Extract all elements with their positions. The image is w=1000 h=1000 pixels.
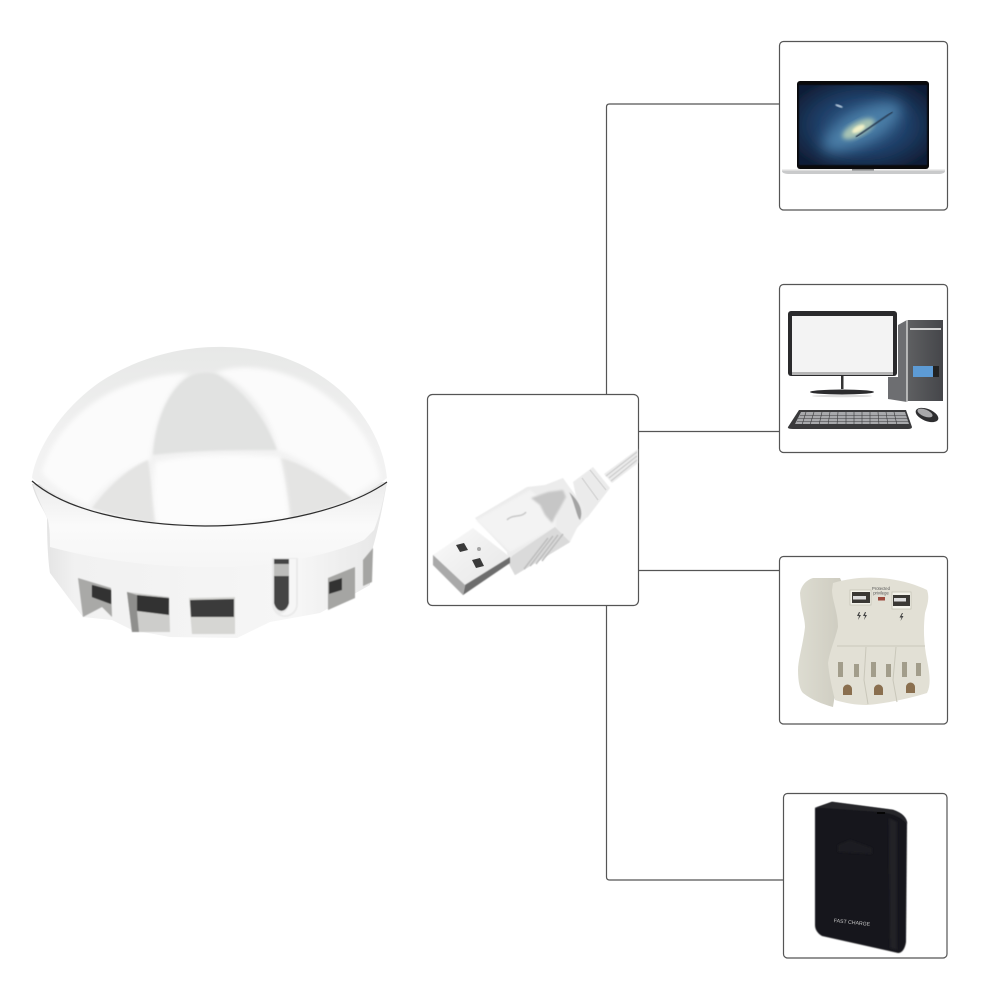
panel seams [837,646,925,704]
fast charge label: FAST CHARGE [833,918,871,928]
lightning marks [857,612,867,620]
dome highlights [42,374,190,505]
cable [604,449,638,483]
socket 1 [838,662,859,695]
plug square holes [456,543,468,552]
laptop base [782,169,945,174]
privilege label: privilege [873,590,889,596]
panel frame [780,556,948,724]
laptop screen [799,85,927,165]
tower display [913,366,933,377]
small distant nebula [835,104,843,108]
vent slot 3 [189,597,235,634]
vent slot 6 [363,548,373,586]
connector lines [606,104,783,880]
monitor [788,311,897,376]
vent slot 5 [328,567,355,610]
plug strain relief [573,467,610,518]
outlet side [798,578,850,707]
keyboard [788,410,912,429]
panel frame [784,794,947,958]
socket 2 [871,662,891,695]
vent slot 4: rounded U [272,558,298,617]
clear plug housing [475,478,587,575]
laptop bezel [797,81,929,169]
monitor stand [841,376,844,389]
mouse [914,405,940,425]
panel: desktop computer [780,284,948,452]
panel frame [428,394,638,606]
USB port left [850,590,871,605]
panel: USB cable [428,394,638,606]
dome top [32,347,387,526]
panel frame [780,284,948,452]
USB port right [892,592,911,609]
panel: power bank [784,794,947,958]
metal USB plug [433,528,510,595]
top face [815,802,907,824]
panel frame [780,42,948,210]
product: white dome device [32,347,387,638]
dark seam line [32,481,387,526]
right edge sheen [889,818,897,950]
faint logo [838,840,872,854]
vent slot 1 [78,578,112,617]
USB port [877,812,885,814]
galaxy [816,92,908,162]
lightning mark [900,613,904,621]
base upper glossy band [33,484,386,567]
indicator LED [878,597,885,600]
dome centre highlight [154,455,289,525]
dome grey reflection [153,373,277,455]
power bank body [815,802,907,953]
vent slot 2 [127,592,170,632]
outlet front [828,578,930,705]
computer tower [888,320,907,402]
panel: wall outlet with USB [780,556,948,724]
socket 3 [902,662,921,693]
panel: laptop [780,42,948,210]
device base [32,482,387,638]
protected label: Protected [872,586,891,591]
